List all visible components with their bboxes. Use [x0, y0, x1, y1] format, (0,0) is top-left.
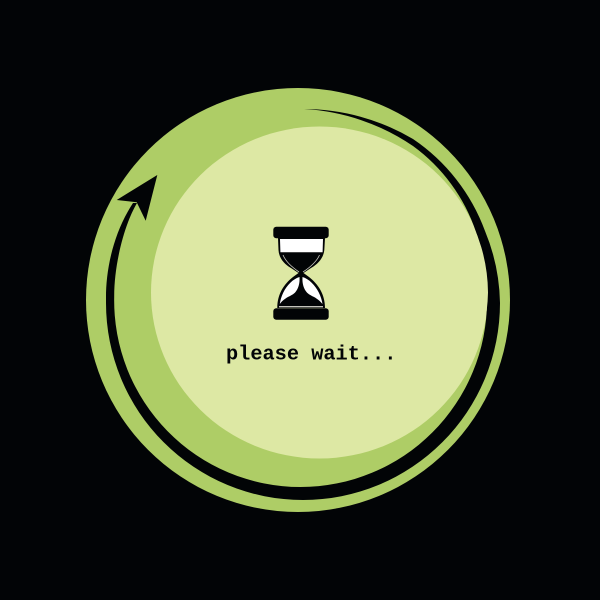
hourglass body — [277, 238, 325, 308]
glass side lines — [283, 255, 320, 272]
icon: hourglass — [273, 227, 329, 320]
bottom cap — [273, 308, 329, 320]
arrow head — [117, 175, 157, 221]
top cap — [273, 227, 329, 238]
lower glass left — [280, 277, 300, 304]
base line — [279, 306, 323, 307]
inner pale disc — [151, 126, 488, 458]
outer green disc — [86, 88, 510, 512]
pale disc edge over arrow — [462, 205, 488, 360]
upper glass — [280, 239, 323, 252]
arrow body — [106, 109, 500, 500]
lower glass right — [302, 277, 322, 304]
caption: please wait... — [226, 344, 396, 366]
icon: circular arrow — [106, 109, 500, 500]
